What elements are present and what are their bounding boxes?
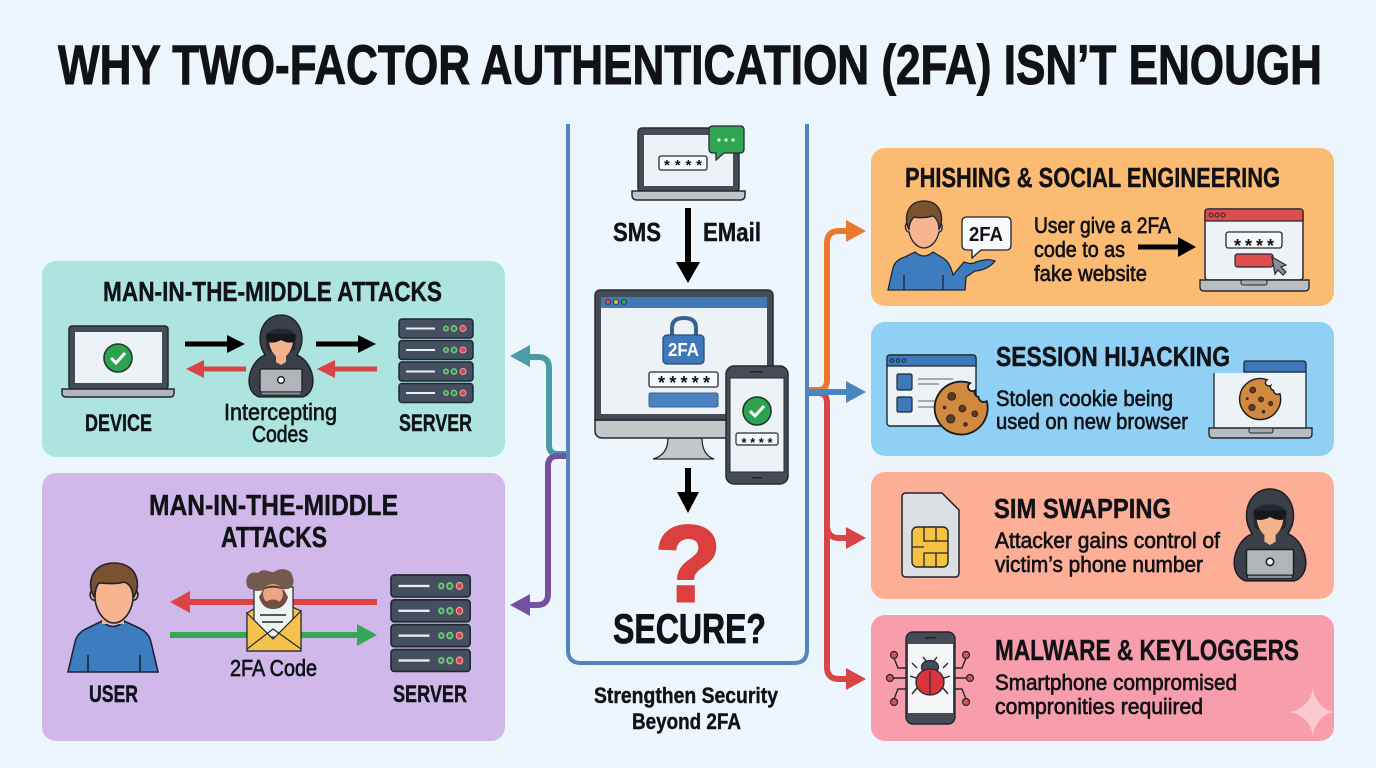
heading: malware and keyloggers: MALWARE & KEYLOGGERS — [995, 635, 1299, 667]
icon: hooded attacker — [249, 315, 313, 397]
text: attacker gains control — [995, 528, 1221, 577]
icon: monitor with 2FA lock: ***** — [658, 373, 710, 393]
heading: session hijacking: SESSION HIJACKING — [996, 341, 1230, 372]
icon: smartphone with check — [726, 366, 788, 484]
text: smartphone compromised — [995, 670, 1237, 719]
panel: SIM swapping — [871, 472, 1334, 599]
icon: laptop with SMS bubble — [632, 126, 745, 200]
text: smartphone compromised: Smartphone compromised — [995, 670, 1237, 695]
text: user gives code to fake website: User give a 2FA — [1034, 213, 1171, 238]
icon: envelope with attacker face — [246, 569, 301, 651]
panel: phishing and social engineering — [871, 148, 1334, 306]
icon: fake website laptop: **** — [1234, 236, 1274, 256]
icon: fake website laptop — [1200, 209, 1309, 291]
arrow: down to question mark — [677, 468, 699, 513]
callout: 2FA speech bubble — [962, 217, 1011, 258]
panel: malware and keyloggers — [871, 615, 1334, 741]
center frame — [568, 124, 807, 663]
label: EMail: EMail — [703, 217, 761, 247]
arrow: server to user (red) — [170, 591, 377, 613]
label: user: USER — [89, 681, 138, 708]
callout: 2FA speech bubble: 2FA — [969, 224, 1003, 246]
text: stolen cookie: used on new browser — [996, 409, 1188, 434]
heading: phishing and social engineering: PHISHING & SOCIAL ENGINEERING — [905, 162, 1280, 193]
caption: strengthen security beyond 2FA: Beyond 2FA — [632, 709, 741, 734]
arrow: device to attacker — [185, 335, 245, 353]
arrow: server to attacker — [317, 360, 377, 378]
icon: SIM card — [902, 493, 959, 577]
connector arrow: red to SIM swapping and malware panels — [809, 393, 866, 690]
icon: user — [68, 563, 158, 672]
label: SMS: SMS — [613, 217, 661, 247]
text: user gives code to fake website: fake website — [1034, 261, 1147, 286]
label: server: SERVER — [393, 681, 467, 708]
icon: laptop on new browser with cookie — [1209, 361, 1312, 438]
connector arrow: purple to man-in-the-middle panel — [510, 456, 567, 616]
icon: monitor with 2FA lock — [595, 290, 773, 459]
connector arrow: orange to phishing panel — [809, 220, 866, 390]
label: intercepting codes — [224, 399, 337, 447]
label: intercepting codes: Intercepting — [224, 399, 337, 425]
text: user gives code to fake website: code to as — [1034, 237, 1125, 262]
label: device: DEVICE — [85, 410, 152, 437]
connector arrow: blue to session hijacking panel — [807, 381, 866, 403]
heading: man-in-the-middle attacks, two lines — [149, 490, 398, 554]
icon: server rack — [391, 575, 470, 671]
icon: phone with bug and circuit nodes — [886, 632, 974, 724]
icon: red question mark: ? — [655, 503, 721, 624]
heading: man-in-the-middle attacks, two lines: MAN-IN-THE-MIDDLE — [149, 490, 398, 522]
connector arrow: teal to man-in-the-middle panel — [510, 345, 567, 454]
text: smartphone compromised: compronities requiired — [995, 694, 1203, 719]
caption: strengthen security beyond 2FA: Strengthen Security — [594, 683, 779, 708]
heading: man-in-the-middle attacks: MAN-IN-THE-MIDDLE ATTACKS — [103, 276, 442, 307]
panel: man-in-the-middle attacks (teal) — [42, 261, 505, 457]
heading: SIM swapping: SIM SWAPPING — [994, 493, 1171, 524]
text: attacker gains control: victim’s phone number — [995, 552, 1203, 577]
icon: hooded attacker — [1234, 489, 1306, 581]
heading: man-in-the-middle attacks, two lines: ATTACKS — [221, 522, 327, 554]
arrow: attacker to device — [186, 360, 246, 378]
icon: monitor with 2FA lock: 2FA — [668, 340, 699, 360]
text: user gives code to fake website — [1034, 213, 1171, 286]
label: intercepting codes: Codes — [252, 421, 308, 447]
label: server: SERVER — [399, 410, 472, 437]
icon: server rack — [399, 319, 473, 402]
icon: smartphone with check: **** — [742, 435, 773, 450]
icon: browser with cookie — [887, 355, 988, 435]
caption: strengthen security beyond 2FA — [594, 683, 779, 734]
icon: user offering code — [888, 201, 995, 290]
arrow: delivery down to monitor — [676, 208, 700, 283]
icon: sparkle — [1289, 688, 1334, 736]
arrow: attacker to server — [316, 335, 376, 353]
text: stolen cookie — [996, 386, 1188, 434]
label: 2FA code: 2FA Code — [230, 655, 317, 681]
icon: device laptop with check — [62, 326, 174, 397]
icon: laptop with SMS bubble: **** — [664, 157, 702, 174]
panel: session hijacking — [871, 322, 1334, 456]
panel: man-in-the-middle attacks (purple) — [42, 473, 505, 741]
text: stolen cookie: Stolen cookie being — [996, 386, 1173, 411]
label: secure?: SECURE? — [613, 605, 766, 652]
arrow: to fake website — [1138, 237, 1196, 257]
text: attacker gains control: Attacker gains control of — [995, 528, 1221, 553]
arrow: user to server (green) — [170, 624, 377, 646]
